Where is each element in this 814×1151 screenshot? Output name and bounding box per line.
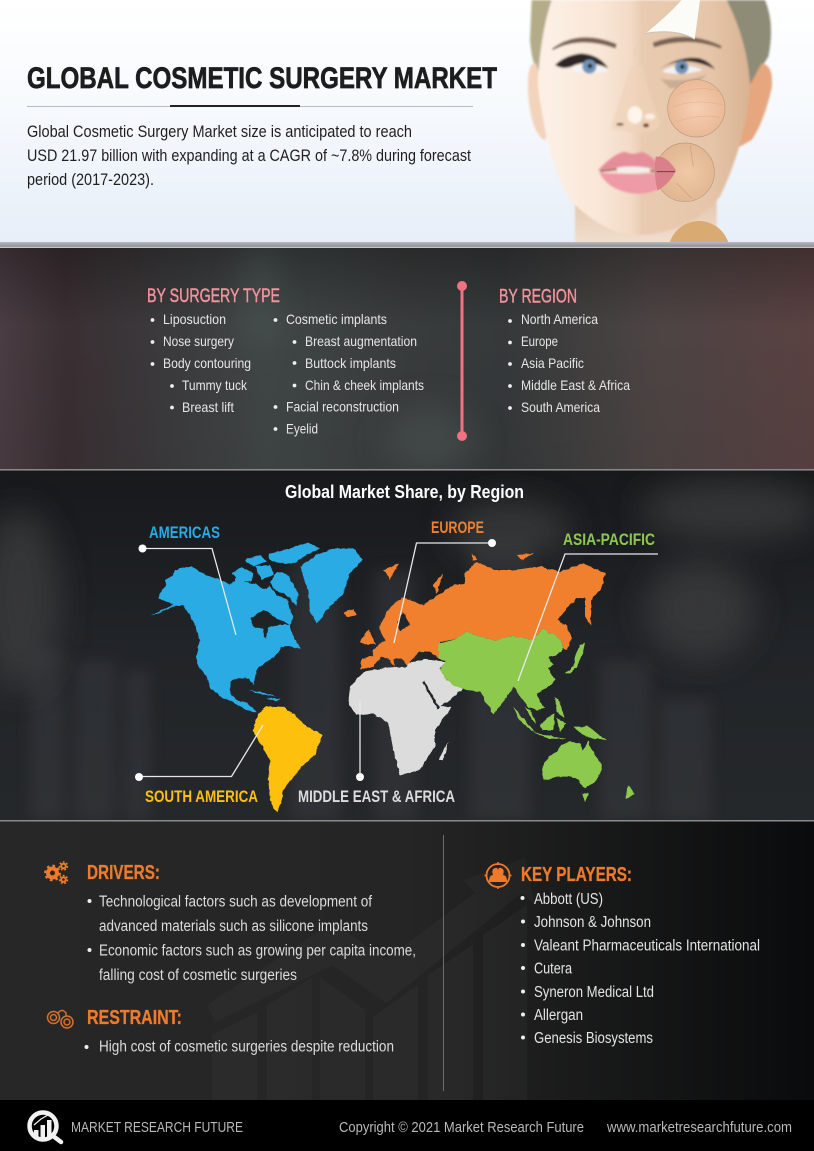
intro text — [27, 123, 471, 189]
map: Europe and Russia — [344, 553, 605, 669]
list: surgery type column 2 — [274, 311, 424, 436]
icon: key players — [484, 862, 512, 889]
list: regions — [508, 311, 630, 415]
leader: Middle East and Africa — [356, 701, 364, 781]
chart title: Global Market Share, by Region — [285, 482, 524, 502]
map: Americas — [151, 543, 363, 713]
leader: Europe — [394, 539, 496, 643]
list: regions: North America — [521, 311, 598, 327]
title: GLOBAL COSMETIC SURGERY MARKET — [27, 62, 497, 95]
list: drivers: Technological factors such as development of — [99, 894, 373, 910]
list: drivers: advanced materials such as silicone implants — [99, 918, 368, 935]
list: regions: Middle East & Africa — [521, 377, 630, 393]
list: drivers: Economic factors such as growing per capita income, — [99, 942, 416, 960]
list: surgery type column 2: Buttock implants — [305, 355, 396, 371]
list: regions: Europe — [521, 333, 558, 349]
intro text: USD 21.97 billion with expanding at a CAGR of ~7.8% during forecast — [27, 147, 471, 165]
label: Europe: EUROPE — [431, 518, 484, 537]
list: key players: Allergan — [534, 1007, 583, 1024]
copyright: Copyright © 2021 Market Research Future — [339, 1119, 584, 1136]
heading: by surgery type: BY SURGERY TYPE — [147, 285, 280, 307]
heading: key players: KEY PLAYERS: — [521, 864, 632, 886]
leader: Americas — [138, 544, 236, 635]
photo: woman's face with skin detail — [526, 0, 774, 242]
website: www.marketresearchfuture.com — [606, 1119, 792, 1136]
list: key players: Valeant Pharmaceuticals International — [534, 938, 760, 954]
list: key players: Genesis Biosystems — [534, 1030, 653, 1047]
list: drivers: falling cost of cosmetic surgeries — [99, 967, 297, 984]
heading: drivers: DRIVERS: — [87, 862, 160, 884]
footer — [0, 1100, 814, 1151]
list: surgery type column 2: Facial reconstruction — [286, 398, 399, 414]
label: South America: SOUTH AMERICA — [145, 787, 258, 806]
divider with end dots — [457, 281, 467, 441]
panel: segmentation — [0, 248, 814, 475]
icon: logo — [30, 1112, 61, 1142]
list: key players: Cutera — [534, 960, 572, 978]
brand name: MARKET RESEARCH FUTURE — [71, 1119, 243, 1136]
list: surgery type column 2: Eyelid — [286, 420, 318, 436]
list: key players: Johnson & Johnson — [534, 914, 651, 931]
panel: global market share map — [0, 471, 814, 822]
map: Asia-Pacific — [438, 628, 634, 802]
list: key players: Syneron Medical Ltd — [534, 984, 654, 1001]
title underline — [27, 105, 473, 107]
panel: drivers, restraint and key players — [0, 822, 814, 1100]
list: surgery type column 2: Chin & cheek implants — [305, 377, 424, 393]
list: key players: Abbott (US) — [534, 891, 603, 908]
label: Middle East and Africa: MIDDLE EAST & AFRICA — [298, 787, 455, 806]
list: surgery type column 1: Nose surgery — [163, 333, 234, 349]
icon: handcuffs — [48, 1010, 73, 1028]
list: surgery type column 1 — [151, 311, 251, 415]
list: surgery type column 1: Tummy tuck — [182, 377, 248, 393]
list: drivers — [88, 894, 416, 984]
list: key players — [520, 891, 760, 1047]
list: surgery type column 1: Body contouring — [163, 355, 251, 371]
list: surgery type column 1: Liposuction — [163, 311, 226, 327]
heading: restraint: RESTRAINT: — [87, 1007, 182, 1029]
list: surgery type column 2: Cosmetic implants — [286, 311, 387, 327]
list: regions: Asia Pacific — [521, 355, 584, 371]
list: surgery type column 1: Breast lift — [182, 399, 234, 415]
intro text: Global Cosmetic Surgery Market size is anticipated to reach — [27, 123, 412, 141]
list: restraint: High cost of cosmetic surgeries despite reduction — [99, 1038, 394, 1056]
list: regions: South America — [521, 399, 600, 415]
map: South America — [253, 707, 323, 813]
label: Americas: AMERICAS — [149, 523, 220, 542]
intro text: period (2017-2023). — [27, 171, 154, 189]
heading: by region: BY REGION — [499, 286, 577, 308]
label: Asia-Pacific: ASIA-PACIFIC — [563, 530, 655, 549]
panel: header — [0, 0, 814, 248]
map: Middle East and Africa — [348, 659, 463, 775]
list: surgery type column 2: Breast augmentation — [305, 333, 417, 349]
leader: South America — [135, 725, 263, 781]
icon: gears — [45, 862, 68, 884]
leader: Asia-Pacific — [518, 554, 658, 681]
